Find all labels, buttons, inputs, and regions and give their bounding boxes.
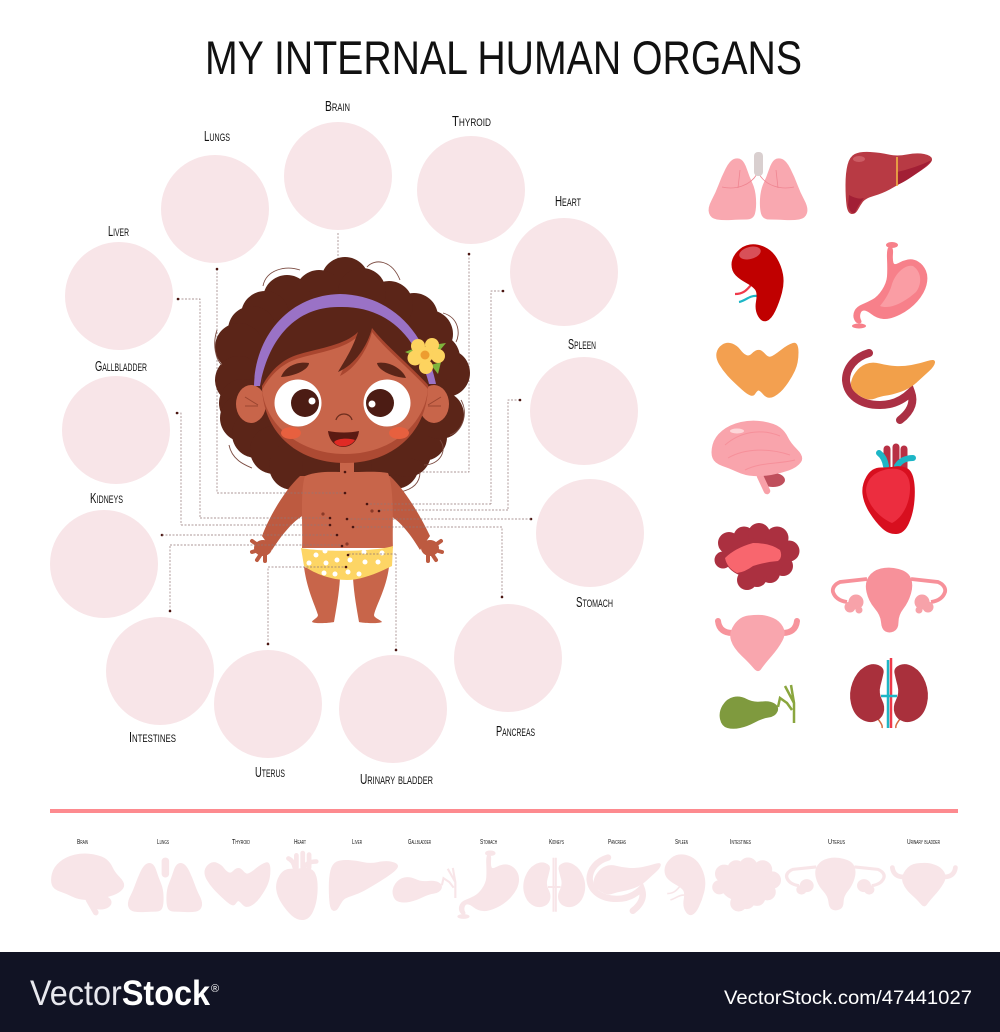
small labels row: Uterus — [828, 837, 845, 846]
small labels row: Lungs — [157, 837, 169, 846]
blank organ circles — [50, 122, 644, 763]
silhouette: intestines — [713, 858, 781, 911]
small labels row: Intestines — [730, 837, 751, 846]
title: MY INTERNAL HUMAN ORGANS — [205, 31, 802, 84]
footer registered mark: ® — [211, 983, 219, 995]
small labels row: Liver — [352, 837, 362, 846]
small labels row: Brain — [77, 837, 88, 846]
small labels row: Pancreas — [608, 837, 626, 846]
organ: liver — [846, 152, 932, 214]
small labels row: Kidneys — [549, 837, 564, 846]
circle labels: Spleen — [568, 336, 596, 353]
organ: pancreas — [846, 353, 935, 420]
girl figure — [162, 257, 531, 623]
silhouette: brain — [51, 854, 124, 912]
cheeks — [281, 427, 409, 439]
eyes — [274, 380, 410, 426]
organ: heart — [863, 447, 914, 534]
circle labels: Brain — [325, 98, 350, 115]
organ: urinary bladder — [718, 615, 797, 671]
circle labels: Liver — [108, 223, 129, 240]
organ: kidneys — [851, 658, 927, 728]
circle labels: Urinary bladder — [360, 771, 433, 788]
organ: spleen — [732, 244, 783, 321]
silhouette: heart — [276, 853, 317, 920]
diaper — [301, 546, 393, 580]
hair — [215, 257, 470, 492]
circle labels: Lungs — [204, 128, 230, 145]
silhouette: kidneys — [524, 858, 585, 912]
circle labels: Pancreas — [496, 723, 535, 740]
circle labels: Heart — [555, 193, 581, 210]
small labels row — [77, 837, 940, 846]
torso — [302, 462, 393, 548]
nose — [336, 414, 352, 420]
small labels row: Spleen — [675, 837, 688, 846]
silhouette: lungs — [128, 858, 202, 912]
silhouette: urinary bladder — [892, 863, 955, 906]
small labels row: Thyroid — [232, 837, 250, 846]
circle labels: Gallbladder — [95, 358, 147, 375]
ears — [236, 385, 449, 423]
dashed connector lines behind figure — [161, 233, 532, 651]
flower — [405, 338, 446, 374]
silhouettes row — [51, 851, 955, 920]
face — [262, 298, 428, 463]
circle labels: Kidneys — [90, 490, 123, 507]
silhouette: uterus — [787, 858, 884, 910]
small labels row: Urinary bladder — [907, 837, 940, 846]
divider line — [50, 809, 958, 813]
eyebrows — [281, 363, 406, 378]
organ: stomach — [852, 242, 927, 328]
fringe — [262, 298, 428, 386]
circle labels: Uterus — [255, 764, 285, 781]
circle labels — [90, 98, 613, 788]
footer logo: VectorStock — [30, 974, 210, 1013]
circle labels: Intestines — [129, 729, 176, 746]
circle labels: Stomach — [576, 594, 613, 611]
silhouette: gallbladder — [393, 868, 455, 902]
organ: thyroid — [717, 343, 798, 397]
footer bar — [0, 952, 1000, 1032]
silhouette: stomach — [458, 851, 519, 918]
organ: lungs — [709, 152, 807, 220]
organ: brain — [712, 421, 802, 491]
silhouette: pancreas — [590, 858, 660, 911]
organ: uterus — [833, 568, 945, 632]
silhouette: spleen — [665, 855, 705, 915]
small labels row: Stomach — [480, 837, 497, 846]
legs — [304, 567, 389, 623]
organ pointer lines and dots on body — [162, 471, 531, 568]
mouth — [328, 431, 359, 447]
footer url: VectorStock.com/47441027 — [724, 988, 972, 1009]
organ: gallbladder — [720, 685, 794, 728]
small labels row: Heart — [294, 837, 306, 846]
silhouette: liver — [329, 860, 398, 911]
circle labels: Thyroid — [452, 113, 491, 130]
silhouette: thyroid — [205, 863, 270, 907]
small labels row: Gallbladder — [408, 837, 431, 846]
arms — [252, 476, 442, 561]
organ: intestines — [714, 523, 800, 590]
headband — [254, 294, 436, 386]
